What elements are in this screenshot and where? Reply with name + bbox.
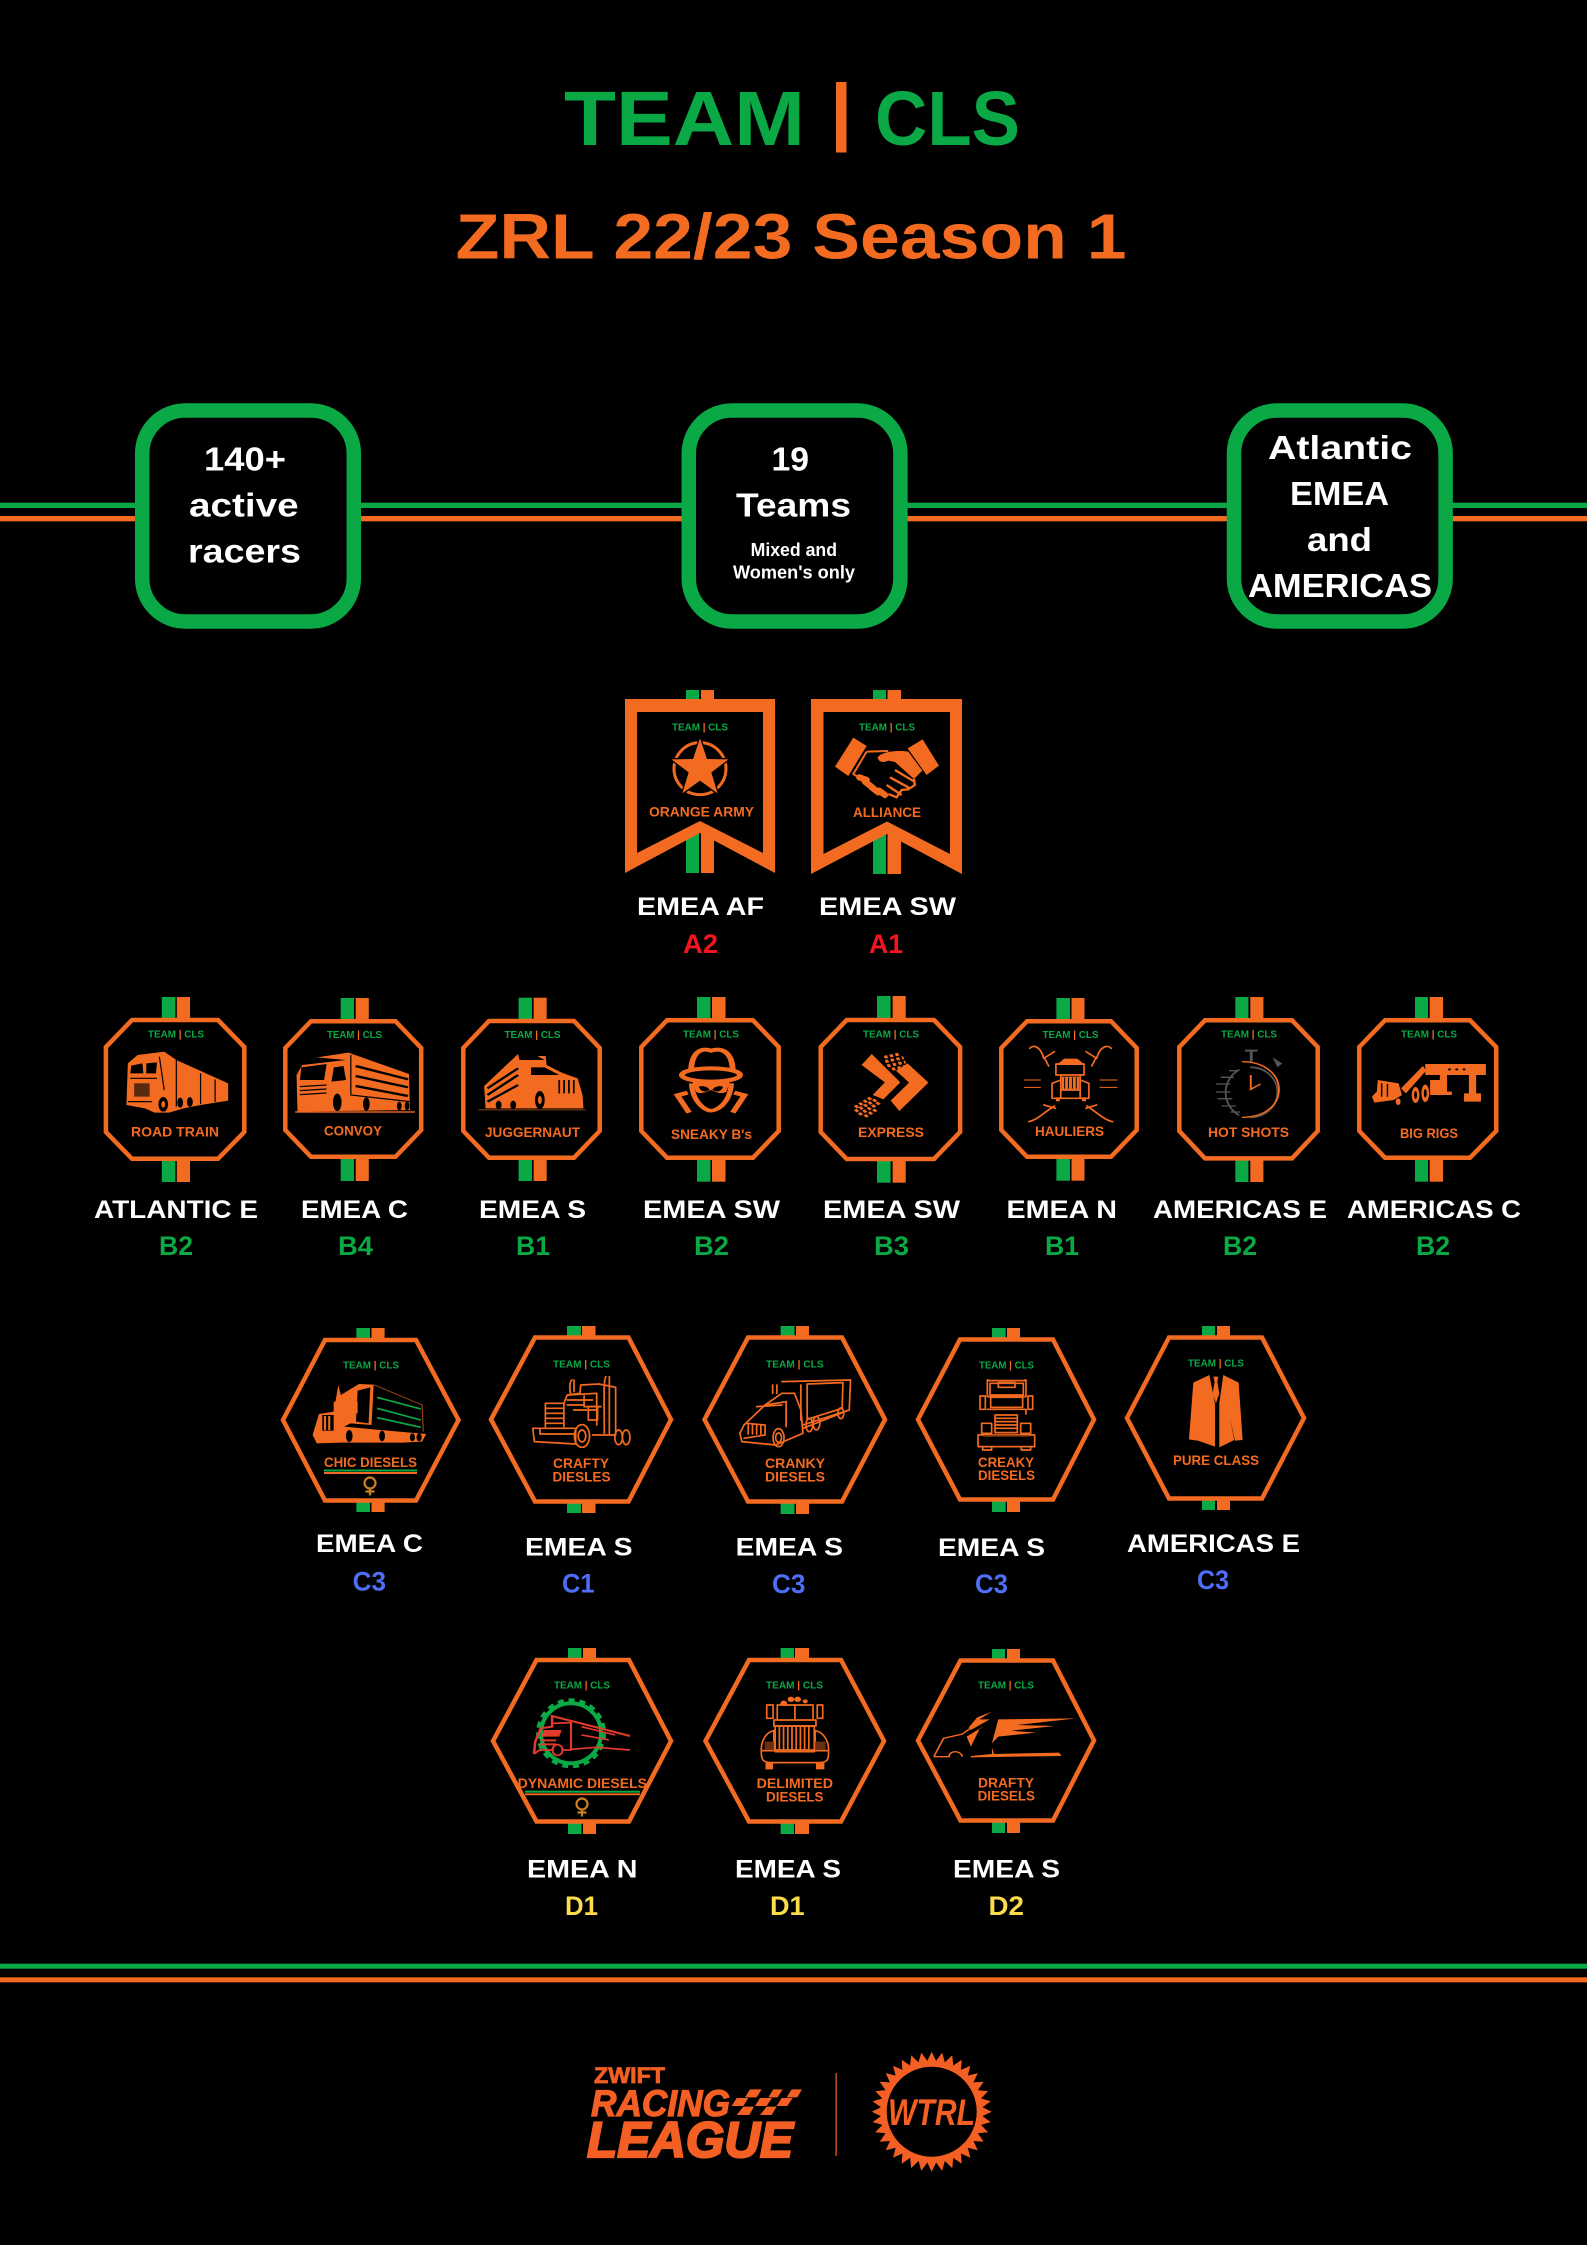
icon: stopwatch — [1216, 1051, 1282, 1117]
division: B1 — [516, 1231, 550, 1261]
logo: Zwift Racing League: RACING — [591, 2083, 730, 2124]
name — [978, 1454, 1035, 1483]
strips — [877, 996, 906, 1183]
name: SNEAKY B's — [671, 1126, 752, 1142]
strips — [519, 998, 547, 1181]
name: DIESELS — [978, 1467, 1035, 1483]
icon: gear with red truck — [534, 1701, 630, 1766]
name: DELIMITED — [757, 1775, 833, 1791]
logo: WTRL gear: WTRL — [888, 2092, 975, 2133]
banner frame — [625, 699, 775, 873]
team tag: TEAM | CLS — [554, 1680, 610, 1692]
octagon frame — [106, 1020, 244, 1159]
icon: speeding truck — [934, 1712, 1076, 1757]
strips — [1202, 1326, 1230, 1510]
title: TEAM | CLS — [564, 76, 1020, 162]
region: EMEA S — [736, 1534, 843, 1562]
name: PURE CLASS — [1173, 1452, 1259, 1468]
subtitle: season: ZRL 22/23 Season 1 — [456, 200, 1127, 272]
strips — [568, 1648, 596, 1834]
name: ORANGE ARMY — [649, 804, 755, 820]
name: HOT SHOTS — [1208, 1124, 1289, 1140]
team tag: TEAM | CLS — [504, 1030, 561, 1041]
logo: WTRL gear — [872, 2052, 992, 2172]
region: EMEA C — [301, 1196, 408, 1224]
name: CONVOY — [324, 1123, 383, 1139]
team: Delimited Diesels — [706, 1648, 884, 1921]
team: Convoy — [285, 998, 421, 1261]
footer stripe lines — [0, 1964, 1587, 1982]
team tag: TEAM | CLS — [1401, 1030, 1457, 1040]
strips — [1415, 997, 1443, 1182]
division: C3 — [975, 1569, 1008, 1599]
hexagon frame — [706, 1660, 884, 1822]
logo: Zwift Racing League: LEAGUE — [587, 2112, 795, 2168]
division: C3 — [1197, 1565, 1229, 1595]
team tag: TEAM | CLS — [148, 1030, 204, 1040]
region: EMEA N — [1006, 1196, 1117, 1224]
panel: active racers: racers — [188, 533, 301, 570]
region: EMEA SW — [823, 1196, 960, 1224]
hexagon frame — [493, 1660, 671, 1822]
name: CRAFTY — [553, 1455, 610, 1471]
name — [765, 1455, 826, 1485]
division: D2 — [988, 1891, 1024, 1921]
division: B1 — [1045, 1231, 1079, 1261]
division: B4 — [338, 1231, 373, 1261]
name: BIG RIGS — [1400, 1125, 1458, 1141]
team: Sneaky B's — [641, 997, 780, 1261]
strips — [992, 1649, 1020, 1833]
name: CRANKY — [765, 1455, 826, 1471]
region: EMEA S — [953, 1856, 1060, 1884]
team: Big Rigs — [1347, 997, 1521, 1261]
panel: active racers — [142, 410, 354, 622]
division: C3 — [353, 1567, 386, 1597]
banner team tag: TEAM | CLS — [672, 722, 728, 734]
icon: female symbol — [364, 1478, 376, 1496]
team tag: TEAM | CLS — [863, 1030, 919, 1040]
icon: line-art truck front — [978, 1380, 1035, 1450]
division: A1 — [869, 929, 903, 959]
name: ROAD TRAIN — [131, 1124, 219, 1140]
logo: Zwift Racing League — [587, 2063, 802, 2168]
banner ribbon — [686, 690, 714, 873]
division: B3 — [874, 1231, 909, 1261]
name: DIESELS — [766, 1789, 824, 1805]
team tag: TEAM | CLS — [979, 1360, 1034, 1372]
team tag: TEAM | CLS — [343, 1360, 399, 1372]
name with underline: CHIC DIESELS — [324, 1454, 417, 1470]
hexagon frame — [1127, 1338, 1304, 1498]
strips — [1235, 997, 1263, 1182]
panel: teams count: Teams — [736, 487, 851, 524]
name: EXPRESS — [858, 1124, 924, 1140]
icon: truck — [313, 1384, 426, 1443]
logo divider — [836, 2073, 837, 2156]
team: Dynamic Diesels — [493, 1648, 671, 1921]
region: EMEA C — [316, 1530, 423, 1558]
name with underline: DYNAMIC DIESELS — [518, 1775, 647, 1791]
icon: convoy truck — [295, 1053, 415, 1113]
team tag: TEAM | CLS — [683, 1030, 739, 1040]
team: Juggernaut — [463, 998, 600, 1261]
icon: handshake — [835, 738, 939, 797]
name: JUGGERNAUT — [485, 1124, 580, 1140]
title: TEAM | CLS: CLS — [875, 76, 1020, 162]
panel: teams count: Mixed and — [751, 540, 837, 560]
octagon frame — [1179, 1020, 1318, 1158]
octagon frame — [1359, 1020, 1496, 1158]
icon: truck front — [761, 1697, 829, 1769]
region: EMEA N — [527, 1856, 638, 1884]
team: Pure Class — [1127, 1326, 1304, 1595]
strips — [162, 997, 190, 1182]
panel: regions: EMEA — [1290, 475, 1389, 512]
name — [978, 1775, 1035, 1804]
panel: regions: Atlantic — [1268, 429, 1412, 466]
hexagon frame — [491, 1338, 671, 1502]
team: Chic Diesels — [283, 1328, 458, 1597]
hexagon frame — [918, 1340, 1094, 1500]
division: D1 — [770, 1891, 805, 1921]
strips — [697, 997, 726, 1182]
region: EMEA S — [525, 1534, 632, 1562]
hexagon frame — [283, 1340, 458, 1500]
title: TEAM | CLS: TEAM — [564, 76, 805, 162]
team tag: TEAM | CLS — [766, 1360, 824, 1370]
icon: line-art truck — [740, 1380, 851, 1447]
panel: teams count: 19 — [772, 441, 809, 478]
icon: star — [671, 738, 729, 795]
region: ATLANTIC E — [94, 1196, 258, 1224]
icon: suit jacket — [1189, 1375, 1243, 1447]
division: D1 — [565, 1891, 598, 1921]
region: EMEA AF — [637, 893, 764, 921]
icon: heavy rig — [1372, 1064, 1486, 1105]
team tag: TEAM | CLS — [1221, 1030, 1277, 1040]
octagon frame — [821, 1020, 960, 1159]
team: Alliance — [811, 690, 962, 959]
name: HAULIERS — [1035, 1123, 1104, 1139]
hexagon frame — [918, 1660, 1094, 1820]
division: B2 — [159, 1231, 193, 1261]
name: DIESLES — [552, 1469, 610, 1485]
strips — [992, 1328, 1020, 1512]
strips — [567, 1326, 596, 1513]
strips — [356, 1328, 385, 1512]
team tag: TEAM | CLS — [1042, 1030, 1099, 1041]
panel: active racers: active — [189, 487, 299, 524]
panel: regions: AMERICAS — [1248, 567, 1432, 604]
team tag: TEAM | CLS — [766, 1680, 823, 1692]
division: C3 — [772, 1569, 806, 1599]
team: Hot Shots — [1153, 997, 1327, 1261]
division: B2 — [1416, 1231, 1450, 1261]
region: EMEA SW — [819, 893, 956, 921]
region: AMERICAS E — [1127, 1530, 1300, 1558]
icon: line-art truck — [533, 1377, 630, 1447]
checkered flag — [732, 2089, 802, 2115]
team tag: TEAM | CLS — [553, 1360, 610, 1370]
octagon frame — [641, 1020, 779, 1158]
strips — [341, 998, 369, 1181]
panel: teams count — [689, 410, 900, 622]
region: EMEA S — [938, 1534, 1045, 1562]
region: EMEA S — [735, 1856, 841, 1884]
strips — [1056, 998, 1084, 1181]
name: DIESELS — [978, 1788, 1035, 1804]
octagon frame — [285, 1021, 421, 1157]
panel: teams count: Women's only — [733, 562, 855, 582]
team: Creaky Diesels — [918, 1328, 1094, 1599]
team: Road Train — [94, 997, 258, 1261]
division: B2 — [1223, 1231, 1257, 1261]
hexagon frame — [704, 1338, 885, 1502]
region: EMEA SW — [643, 1196, 780, 1224]
division: A2 — [683, 929, 718, 959]
team tag: TEAM | CLS — [978, 1680, 1034, 1692]
team: Hauliers — [1001, 998, 1137, 1261]
panel: active racers: 140+ — [204, 441, 286, 478]
panel: regions — [1234, 410, 1446, 622]
team: Orange Army — [625, 690, 775, 959]
team: Drafty Diesels — [918, 1649, 1094, 1921]
team tag: TEAM | CLS — [327, 1030, 382, 1041]
octagon frame — [463, 1021, 600, 1158]
icon: female symbol — [576, 1798, 588, 1816]
division: B2 — [694, 1231, 729, 1261]
icon: express chevrons — [855, 1054, 928, 1117]
icon: front truck with arcs — [1024, 1046, 1117, 1122]
banner team tag: TEAM | CLS — [859, 722, 915, 734]
panel: regions: and — [1307, 521, 1372, 558]
banner ribbon — [873, 690, 901, 874]
region: AMERICAS C — [1347, 1196, 1521, 1224]
team tag: TEAM | CLS — [1188, 1358, 1244, 1370]
team: Express — [821, 996, 960, 1261]
name: DIESELS — [765, 1469, 825, 1485]
strips — [781, 1648, 809, 1834]
logo: Zwift Racing League: ZWIFT — [594, 2063, 666, 2088]
octagon frame — [1001, 1021, 1137, 1157]
team: Cranky Diesels — [704, 1326, 885, 1599]
banner frame — [811, 699, 962, 874]
strips — [781, 1326, 809, 1514]
division: C1 — [562, 1569, 595, 1599]
icon: spy — [678, 1050, 744, 1113]
region: EMEA S — [479, 1196, 586, 1224]
team: Crafty Diesels — [491, 1326, 671, 1599]
name: CREAKY — [978, 1454, 1035, 1470]
icon: juggernaut truck — [478, 1054, 586, 1110]
icon: road train truck — [126, 1052, 228, 1113]
name: DRAFTY — [978, 1775, 1035, 1791]
name — [757, 1775, 833, 1805]
name: ALLIANCE — [853, 804, 921, 820]
stripe lines behind stat boxes — [0, 503, 1587, 521]
name — [552, 1455, 610, 1485]
region: AMERICAS E — [1153, 1196, 1327, 1224]
